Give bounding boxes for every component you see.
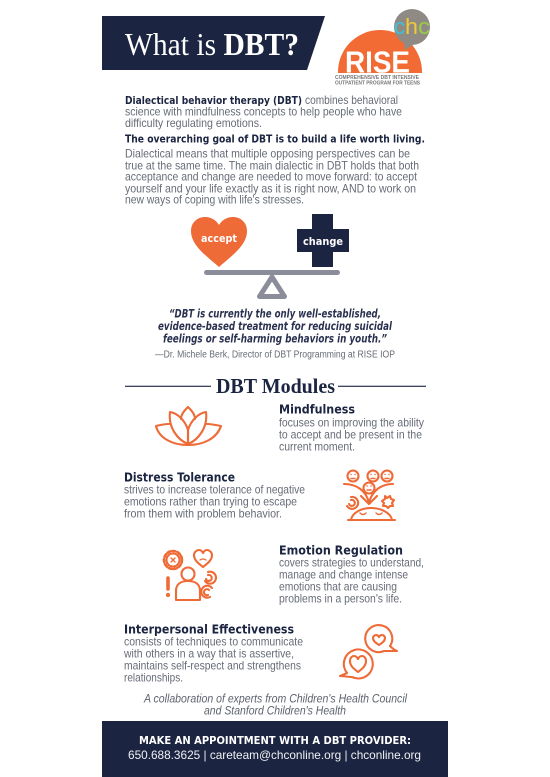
icon: accept heart (191, 217, 247, 267)
dialectic explanation: acceptance and change are needed to move forward: to accept (125, 171, 418, 184)
module: distress tolerance: emotions rather than trying to escape (124, 496, 297, 508)
footer call to action: MAKE AN APPOINTMENT WITH A DBT PROVIDER: (139, 734, 411, 747)
module: interpersonal effectiveness: Interpersonal Effectiveness (124, 622, 294, 636)
footer call to action: 650.688.3625 | careteam@chconline.org | chconline.org (128, 748, 421, 762)
quote: feelings or self-harming behaviors in youth.” (163, 331, 387, 345)
module: emotion regulation: emotions that are causing (279, 581, 397, 594)
intro paragraph (125, 94, 402, 130)
logo: RISE / chc: c (418, 14, 430, 39)
module: distress tolerance: strives to increase tolerance of negative (124, 484, 305, 496)
title banner (102, 16, 325, 70)
dialectic explanation: yourself and your life exactly as it is right now, AND to work on (125, 182, 416, 195)
module: mindfulness: focuses on improving the ability (279, 417, 424, 430)
quote: —Dr. Michele Berk, Director of DBT Programming at RISE IOP (155, 350, 395, 361)
logo: RISE / chc: RISE (345, 44, 410, 80)
module: interpersonal effectiveness: relationships. (124, 672, 183, 685)
module: mindfulness: to accept and be present in the (279, 428, 422, 442)
logo: RISE / chc: c (394, 14, 405, 39)
module: interpersonal effectiveness: with others in a way that is assertive, (123, 647, 294, 660)
quote (155, 307, 395, 361)
module: emotion regulation: Emotion Regulation (279, 543, 403, 557)
dialectic explanation: true at the same time. The main dialectic in DBT holds that both (125, 159, 419, 172)
quote: evidence-based treatment for reducing suicidal (158, 319, 393, 333)
scale fulcrum (260, 277, 284, 296)
logo: RISE / chc (335, 9, 430, 84)
module: emotion regulation: problems in a person's life. (279, 593, 402, 606)
quote: “DBT is currently the only well-established, (169, 307, 381, 321)
icon: change plus: change (303, 235, 343, 248)
module: interpersonal effectiveness: maintains self-respect and strengthens (124, 659, 301, 672)
module: interpersonal effectiveness (123, 622, 303, 685)
intro paragraph: combines behavioral (305, 94, 398, 107)
collaboration credit: and Stanford Children's Health (204, 705, 346, 717)
dialectic explanation (125, 148, 419, 206)
icon: change plus (297, 214, 349, 267)
module: emotion regulation: manage and change intense (279, 568, 408, 582)
balance scale illustration (191, 214, 349, 296)
scale beam (204, 270, 340, 275)
icon: speech bubbles (340, 625, 397, 678)
logo: RISE / chc: OUTPATIENT PROGRAM FOR TEENS (335, 80, 420, 86)
module: distress tolerance: Distress Tolerance (124, 471, 235, 485)
module: mindfulness: current moment. (279, 440, 355, 453)
module: distress tolerance: from them with problem behavior. (124, 507, 282, 520)
icon: emotion regulation (164, 550, 216, 600)
icon: distress faces (344, 470, 395, 520)
module: emotion regulation: covers strategies to understand, (279, 557, 424, 570)
dialectic explanation: new ways of coping with life's stresses. (125, 194, 304, 206)
goal statement: The overarching goal of DBT is to build a life worth living. (125, 132, 425, 145)
icon: lotus (156, 407, 221, 445)
intro paragraph: Dialectical behavior therapy (DBT) (125, 94, 302, 107)
dialectic explanation: Dialectical means that multiple opposing perspectives can be (125, 148, 410, 161)
logo: RISE / chc: COMPREHENSIVE DBT INTENSIVE (335, 75, 419, 81)
title banner: What is DBT? (125, 26, 299, 62)
icon: accept heart: accept (201, 232, 237, 245)
module: mindfulness (279, 403, 424, 453)
intro paragraph: difficulty regulating emotions. (125, 117, 262, 130)
footer call to action (102, 721, 448, 777)
collaboration credit (143, 693, 407, 717)
module: mindfulness: Mindfulness (279, 403, 355, 417)
intro paragraph: science with mindfulness concepts to help people who have (125, 106, 402, 118)
collaboration credit: A collaboration of experts from Children's Health Council (143, 693, 407, 705)
module: interpersonal effectiveness: consists of techniques to communicate (124, 635, 303, 648)
section heading: DBT Modules: DBT Modules (216, 374, 335, 398)
module: emotion regulation (279, 543, 424, 606)
logo: RISE / chc: h (405, 14, 418, 39)
module: distress tolerance (124, 471, 305, 520)
